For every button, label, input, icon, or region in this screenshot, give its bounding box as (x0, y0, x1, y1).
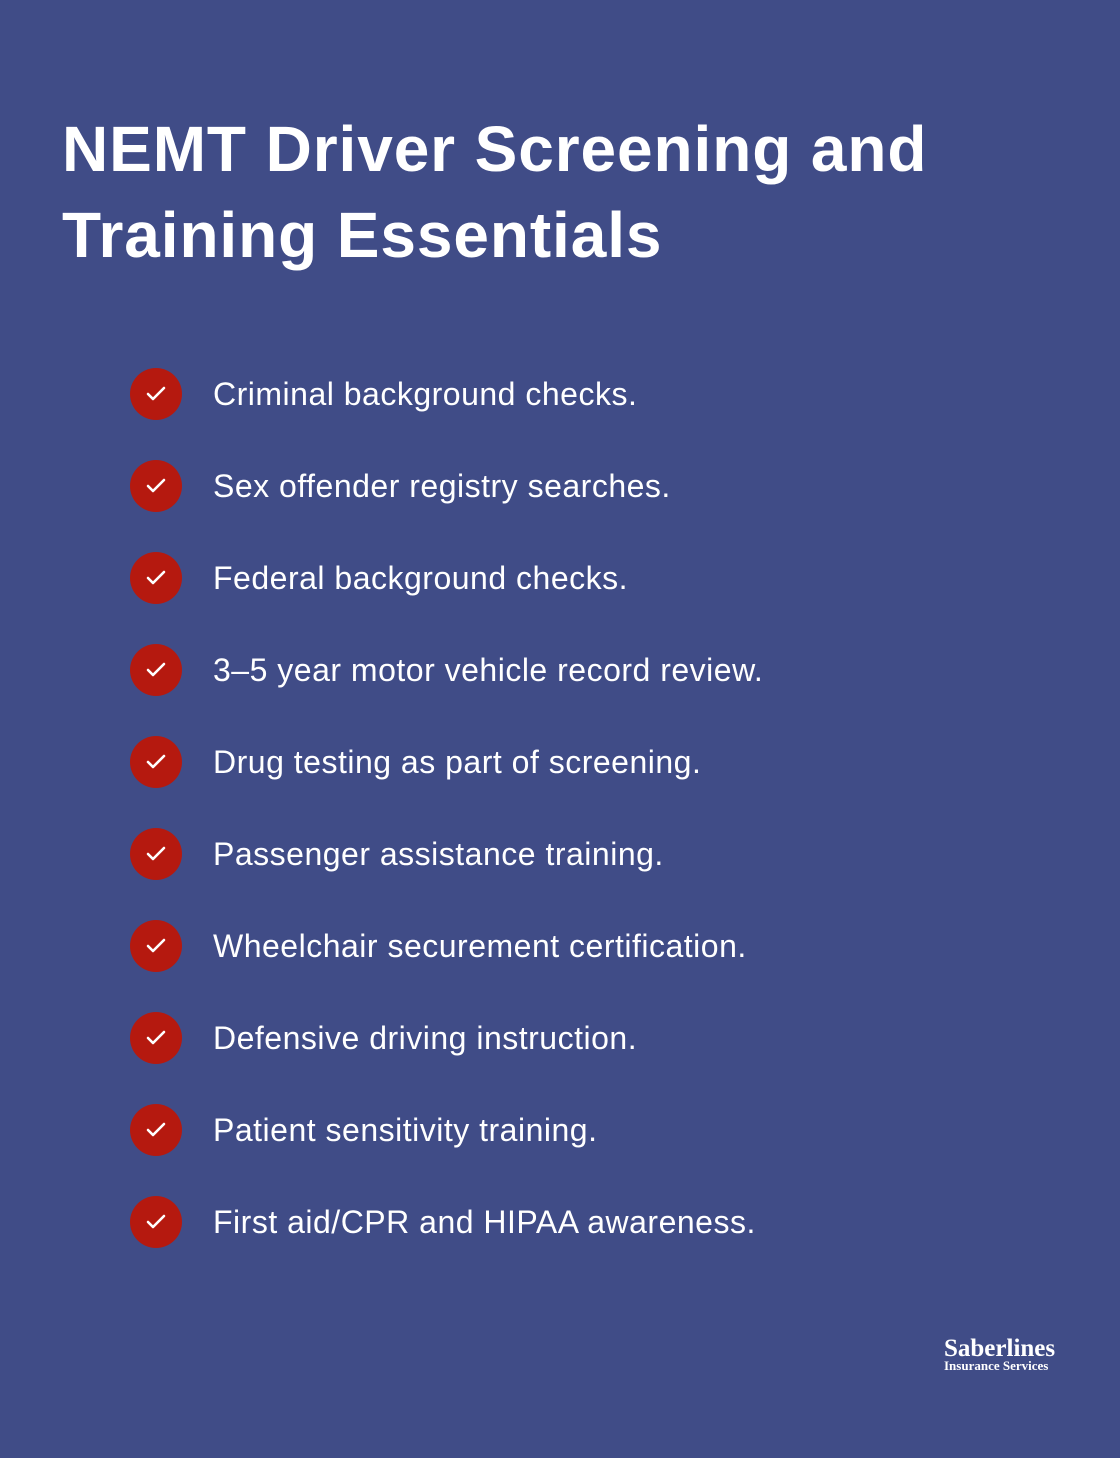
checklist (130, 368, 763, 1248)
item: motor vehicle (130, 644, 763, 696)
item: drug testing (130, 736, 701, 788)
item: drug testing: Drug testing as part of screening. (213, 744, 701, 780)
item: federal (130, 552, 628, 604)
item: federal: Federal background checks. (213, 560, 628, 596)
title: Training Essentials (62, 199, 662, 271)
item: passenger assistance: Passenger assistance training. (213, 836, 664, 872)
logo: Saberlines (944, 1335, 1055, 1362)
item: criminal background: Criminal background checks. (213, 376, 637, 412)
item: motor vehicle: 3–5 year motor vehicle record review. (213, 652, 763, 688)
title (62, 113, 927, 271)
item: criminal background (130, 368, 637, 420)
item: defensive driving: Defensive driving instruction. (213, 1020, 637, 1056)
logo: Insurance Services (944, 1358, 1048, 1373)
item: defensive driving (130, 1012, 637, 1064)
item: first aid: First aid/CPR and HIPAA awareness. (213, 1204, 756, 1240)
item: wheelchair (130, 920, 747, 972)
item: first aid (130, 1196, 756, 1248)
item: sex offender: Sex offender registry searches. (213, 468, 671, 504)
item: passenger assistance (130, 828, 664, 880)
item: patient sensitivity (130, 1104, 597, 1156)
item: wheelchair: Wheelchair securement certification. (213, 928, 747, 964)
title: NEMT Driver Screening and (62, 113, 927, 185)
item: patient sensitivity: Patient sensitivity training. (213, 1112, 597, 1148)
item: sex offender (130, 460, 671, 512)
